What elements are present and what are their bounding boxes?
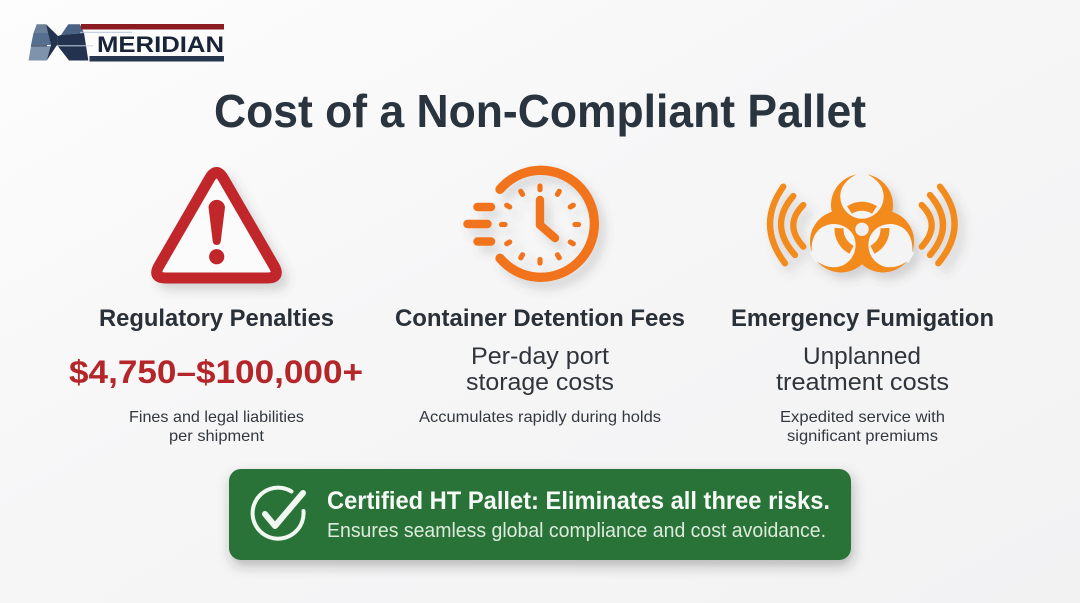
penalty amount: $4,750–$100,000+ [69, 354, 363, 390]
title: Cost of a Non-Compliant Pallet [214, 85, 866, 137]
callout heading: Certified HT Pallet: Eliminates all three risks. [327, 487, 830, 515]
description: Accumulates rapidly during holds [419, 409, 661, 426]
panel: container detention fees [395, 170, 685, 426]
callout: certified HT pallet [229, 469, 851, 560]
cost label: Unplanned [803, 343, 921, 370]
cost label: Per-day port [471, 343, 609, 370]
description [780, 409, 945, 445]
logo mark [28, 24, 132, 60]
description: per shipment [169, 428, 265, 445]
callout subtext: Ensures seamless global compliance and cost avoidance. [327, 520, 826, 542]
cost label: storage costs [466, 369, 614, 396]
icon: biohazard with waves [770, 172, 955, 284]
icon: fast clock [468, 170, 594, 277]
description: Expedited service with [780, 409, 945, 426]
description: significant premiums [787, 428, 938, 445]
logo navy bar [90, 56, 224, 62]
icon: warning triangle [157, 173, 276, 278]
cost label [466, 343, 614, 396]
description: Fines and legal liabilities [129, 409, 304, 426]
panel: regulatory penalties [69, 173, 363, 445]
cost label: treatment costs [776, 369, 949, 396]
logo: Meridian [28, 24, 224, 62]
cost label [776, 343, 949, 396]
panel: emergency fumigation [731, 172, 994, 445]
heading: Emergency Fumigation [731, 305, 994, 332]
callout background [229, 469, 851, 560]
logo red bar [81, 24, 224, 30]
logo wordmark: MERIDIAN [97, 32, 224, 57]
icon: check circle [253, 488, 304, 539]
description [129, 409, 304, 445]
heading: Container Detention Fees [395, 305, 685, 332]
heading: Regulatory Penalties [99, 305, 334, 332]
